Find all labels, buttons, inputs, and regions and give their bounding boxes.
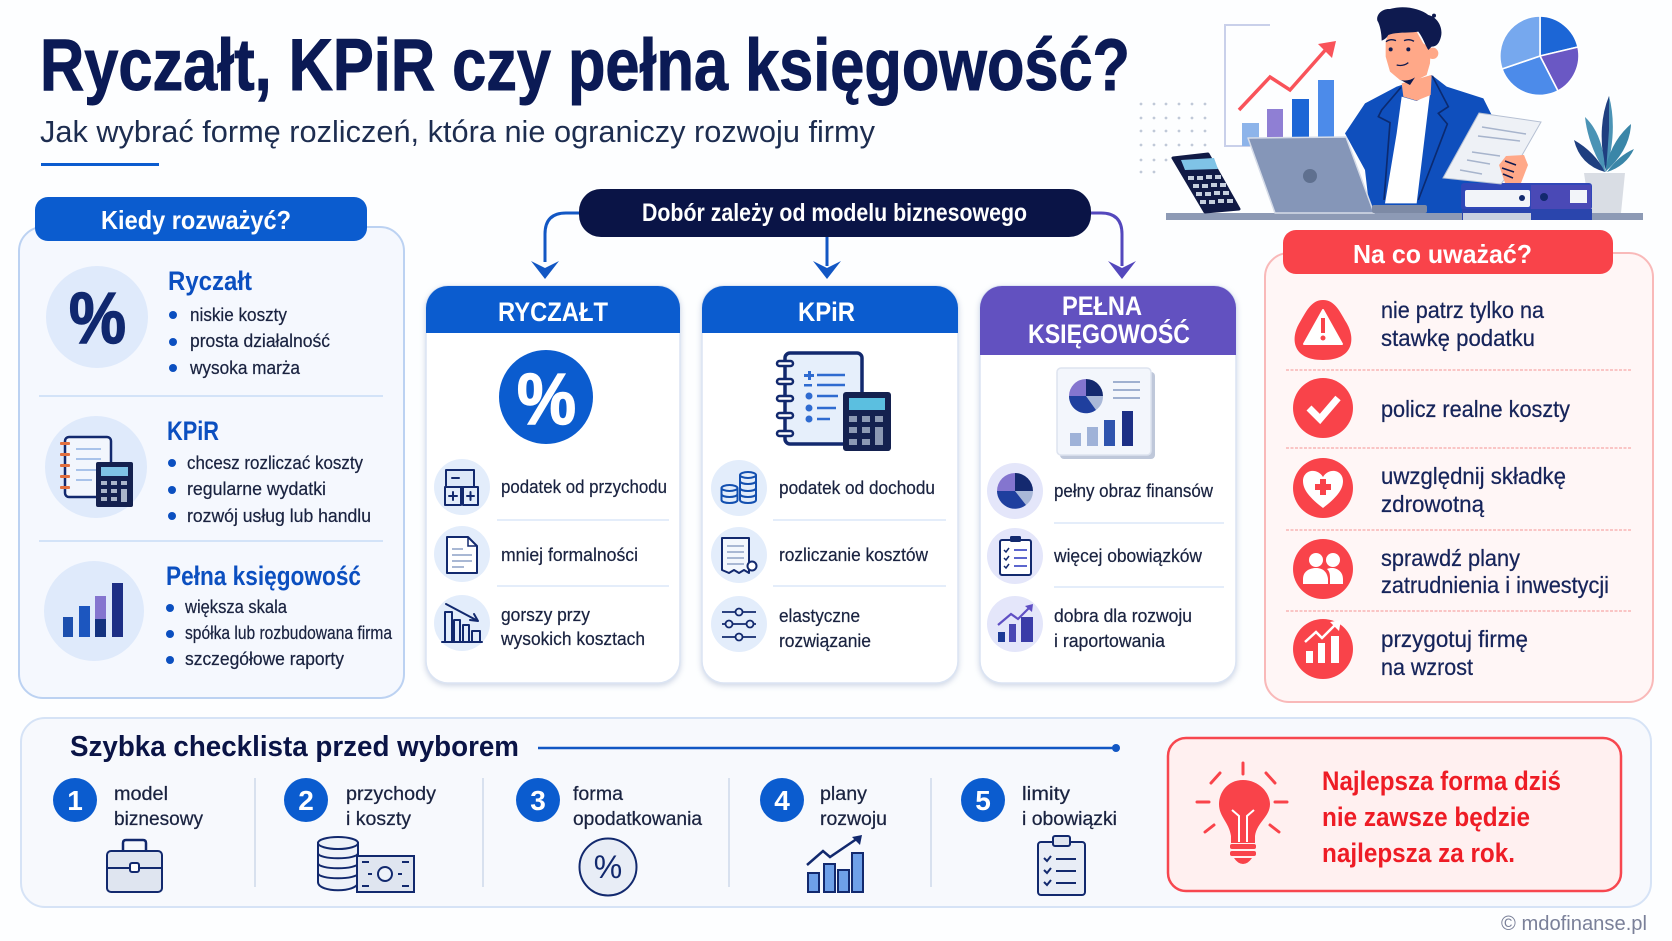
step 3: opodatkowania	[573, 808, 702, 830]
row: dobra dla rozwoju: i raportowania	[1054, 631, 1166, 651]
laptop	[1248, 137, 1427, 213]
item: składka zdrowotna	[1293, 458, 1566, 518]
row: dobra dla rozwoju	[987, 596, 1192, 652]
block: kpir	[167, 416, 371, 526]
step 5: 5	[975, 785, 991, 816]
card header: PEŁNA	[1062, 291, 1142, 321]
banner: dobór zależy od modelu	[579, 189, 1091, 237]
block: ryczałt	[168, 266, 330, 378]
card header: RYCZAŁT	[498, 297, 608, 327]
step 1	[53, 778, 203, 892]
step 4: rozwoju	[820, 808, 887, 830]
item: wzrost	[1293, 619, 1528, 680]
icon: notebook and calculator	[777, 353, 891, 451]
row: elastyczne rozwiązanie: rozwiązanie	[779, 631, 871, 651]
row: podatek od przychodu	[434, 459, 667, 515]
item: wzrost: przygotuj firmę	[1381, 626, 1528, 652]
item: plany	[1293, 539, 1609, 599]
panel: ryczałt card	[426, 286, 680, 683]
item: plany: zatrudnienia i inwestycji	[1381, 572, 1609, 598]
panel: kpir card	[702, 286, 958, 683]
item: stawka: stawkę podatku	[1381, 325, 1535, 351]
item: składka zdrowotna: uwzględnij składkę	[1381, 463, 1566, 489]
block: pełna księgowość: szczegółowe raporty	[185, 649, 344, 669]
icon: bars	[44, 561, 144, 661]
block: pełna księgowość: większa skala	[184, 597, 288, 617]
icon: big percent: %	[517, 360, 576, 440]
item: plany: sprawdź plany	[1381, 545, 1520, 571]
card header	[702, 286, 958, 333]
step 3	[516, 778, 702, 896]
step 3: 3	[530, 785, 546, 816]
icon: light bulb	[1197, 763, 1287, 864]
dot grid	[1140, 103, 1206, 173]
card header	[980, 286, 1236, 355]
desk	[1166, 213, 1643, 220]
banner: dobór zależy od modelu: Dobór zależy od modelu biznesowego	[642, 199, 1027, 227]
block: kpir: KPiR	[167, 416, 219, 446]
callout text	[1322, 766, 1561, 868]
icon: percent	[46, 266, 148, 368]
chart bars	[1242, 80, 1334, 146]
step 2: 2	[298, 785, 314, 816]
row: gorszy przy wysokich kosztach: wysokich kosztach	[500, 629, 645, 649]
step 1: biznesowy	[114, 808, 203, 830]
row: rozliczanie kosztów	[711, 527, 929, 583]
block: ryczałt: prosta działalność	[190, 331, 330, 351]
block: kpir: rozwój usług lub handlu	[187, 506, 371, 526]
step 5: i obowiązki	[1022, 808, 1117, 830]
row: elastyczne rozwiązanie: elastyczne	[779, 606, 860, 626]
panel: kiedy rozważyć	[19, 197, 404, 698]
arrow: to ryczałt	[531, 213, 579, 279]
row: podatek od dochodu: podatek od dochodu	[779, 478, 935, 498]
item: stawka: nie patrz tylko na	[1381, 297, 1544, 323]
block: pełna księgowość: spółka lub rozbudowana firma	[185, 623, 393, 643]
icon: notebook with calculator	[45, 416, 147, 518]
step 3: %	[594, 849, 622, 885]
calculator	[1173, 154, 1239, 212]
step 1: model	[114, 783, 168, 805]
item: składka zdrowotna: zdrowotną	[1381, 491, 1484, 517]
card header: KSIĘGOWOŚĆ	[1028, 318, 1190, 349]
icon: report	[1057, 368, 1155, 459]
block: ryczałt: niskie koszty	[190, 305, 287, 325]
card header	[426, 286, 680, 333]
plant	[1574, 96, 1634, 213]
title underline	[41, 163, 159, 166]
row: więcej obowiązków	[987, 528, 1203, 584]
arrow: to kpir	[813, 237, 841, 279]
block: pełna księgowość: Pełna księgowość	[166, 561, 361, 591]
step 5: limity	[1022, 783, 1070, 805]
panel: szybka checklista	[21, 718, 1651, 907]
step 1: 1	[67, 785, 83, 816]
heading: kiedy rozważyć: Kiedy rozważyć?	[101, 205, 291, 235]
checklist heading: Szybka checklista przed wyborem	[70, 731, 519, 763]
card header: KPiR	[798, 297, 855, 327]
row: mniej formalności	[434, 526, 638, 582]
block: ryczałt: Ryczałt	[168, 266, 252, 296]
row: dobra dla rozwoju: dobra dla rozwoju	[1054, 606, 1192, 626]
item: koszty: policz realne koszty	[1381, 396, 1570, 422]
row: mniej formalności: mniej formalności	[501, 545, 638, 565]
row: podatek od przychodu: podatek od przychodu	[501, 477, 667, 497]
step 4	[760, 778, 887, 892]
item: wzrost: na wzrost	[1381, 654, 1474, 680]
title: Ryczałt, KPiR czy pełna księgowość?	[40, 25, 1130, 106]
row: pełny obraz finansów	[987, 463, 1214, 519]
heading: na co uważać: Na co uważać?	[1353, 239, 1532, 269]
icon: big percent	[499, 350, 593, 444]
red growth arrow	[1239, 41, 1336, 110]
step 3: forma	[573, 783, 623, 805]
row: więcej obowiązków: więcej obowiązków	[1053, 546, 1203, 566]
item: stawka	[1295, 297, 1544, 360]
step 4: plany	[820, 783, 867, 805]
heading: na co uważać	[1283, 230, 1613, 274]
step 2	[284, 778, 436, 892]
callout: najlepsza forma	[1168, 738, 1621, 891]
block: pełna księgowość	[166, 561, 393, 669]
row: elastyczne rozwiązanie	[711, 596, 871, 652]
paper and hand	[1443, 113, 1541, 184]
row: rozliczanie kosztów: rozliczanie kosztów	[779, 545, 929, 565]
block: ryczałt: wysoka marża	[189, 358, 301, 378]
binders	[1461, 183, 1592, 220]
step 2: przychody	[346, 783, 436, 805]
subtitle: Jak wybrać formę rozliczeń, która nie ograniczy rozwoju firmy	[40, 114, 875, 149]
row: gorszy przy wysokich kosztach	[434, 595, 645, 651]
row: podatek od dochodu	[711, 460, 935, 516]
panel: pełna księgowość card	[980, 286, 1236, 683]
callout text: Najlepsza forma dziś	[1322, 766, 1561, 796]
pie chart	[1500, 16, 1579, 95]
person	[1345, 7, 1493, 213]
item: koszty	[1293, 378, 1570, 438]
block: kpir: regularne wydatki	[187, 479, 326, 499]
callout text: nie zawsze będzie	[1322, 802, 1530, 832]
block: kpir: chcesz rozliczać koszty	[187, 453, 363, 473]
copyright: © mdofinanse.pl	[1501, 913, 1647, 935]
panel: na co uważać	[1265, 230, 1653, 702]
row: gorszy przy wysokich kosztach: gorszy przy	[501, 605, 590, 625]
step 2: i koszty	[346, 808, 411, 830]
step 5	[961, 778, 1117, 895]
icon: percent: %	[69, 279, 126, 359]
step 4: 4	[774, 785, 790, 816]
heading: kiedy rozważyć	[35, 197, 367, 241]
row: pełny obraz finansów: pełny obraz finansów	[1054, 481, 1214, 501]
callout text: najlepsza za rok.	[1322, 838, 1515, 868]
arrow: to pełna księgowość	[1091, 213, 1136, 279]
chart frame	[1225, 25, 1270, 146]
illustration: accountant at desk	[1140, 7, 1643, 220]
